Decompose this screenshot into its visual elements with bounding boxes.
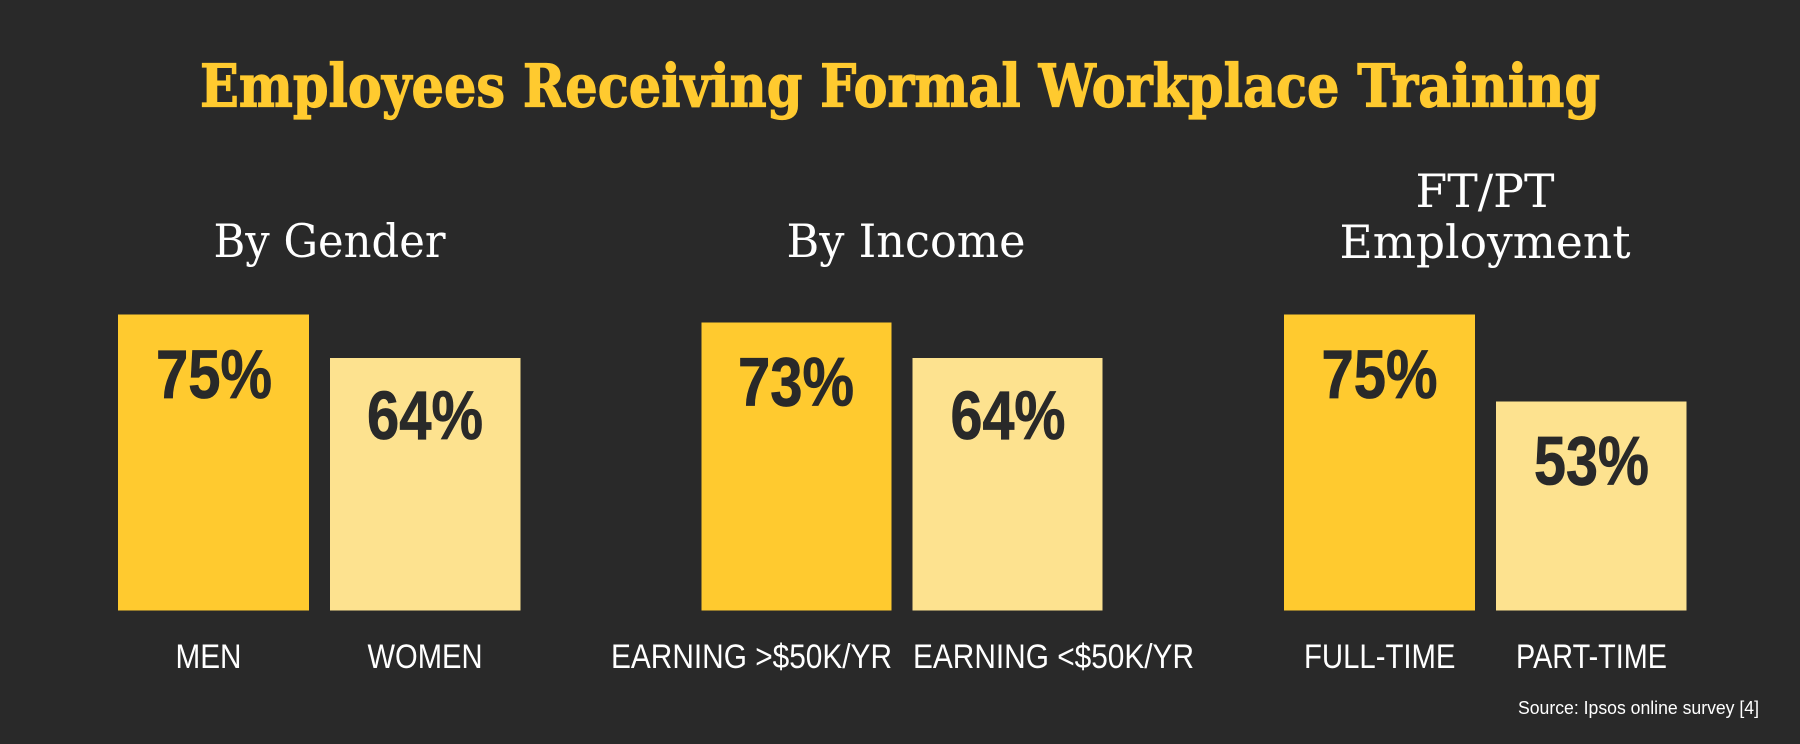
label: men: MEN — [176, 638, 242, 676]
bar: women — [330, 358, 520, 610]
label: earning under 50k: EARNING <$50K/YR — [913, 638, 1194, 676]
bar: earning over 50k — [702, 322, 892, 610]
value: part-time: 53% — [1534, 422, 1649, 500]
value: women: 64% — [367, 377, 483, 454]
panel: by gender — [118, 214, 520, 676]
bar: men — [118, 314, 309, 610]
label: part-time: PART-TIME — [1516, 638, 1667, 676]
heading: ft/pt employment — [1340, 164, 1631, 269]
value: full-time: 75% — [1322, 336, 1438, 413]
value: earning over 50k: 73% — [738, 344, 854, 420]
heading: by gender: By Gender — [214, 214, 446, 268]
source note: Source: Ipsos online survey [4] — [1518, 698, 1759, 718]
heading: by income: By Income — [786, 214, 1026, 268]
label: earning over 50k: EARNING >$50K/YR — [611, 638, 892, 676]
heading: ft/pt employment: FT/PT — [1416, 164, 1555, 218]
heading: ft/pt employment: Employment — [1340, 215, 1631, 269]
panel: ft/pt employment — [1284, 164, 1686, 676]
title: Employees Receiving Formal Workplace Training — [200, 52, 1600, 120]
value: earning under 50k: 64% — [950, 377, 1066, 454]
bar: earning under 50k — [912, 358, 1102, 610]
bar: part-time — [1496, 402, 1686, 610]
value: men: 75% — [156, 336, 272, 413]
label: full-time: FULL-TIME — [1304, 638, 1456, 676]
label: women: WOMEN — [368, 638, 482, 676]
panel: by income — [611, 214, 1194, 676]
bar: full-time — [1284, 314, 1475, 610]
